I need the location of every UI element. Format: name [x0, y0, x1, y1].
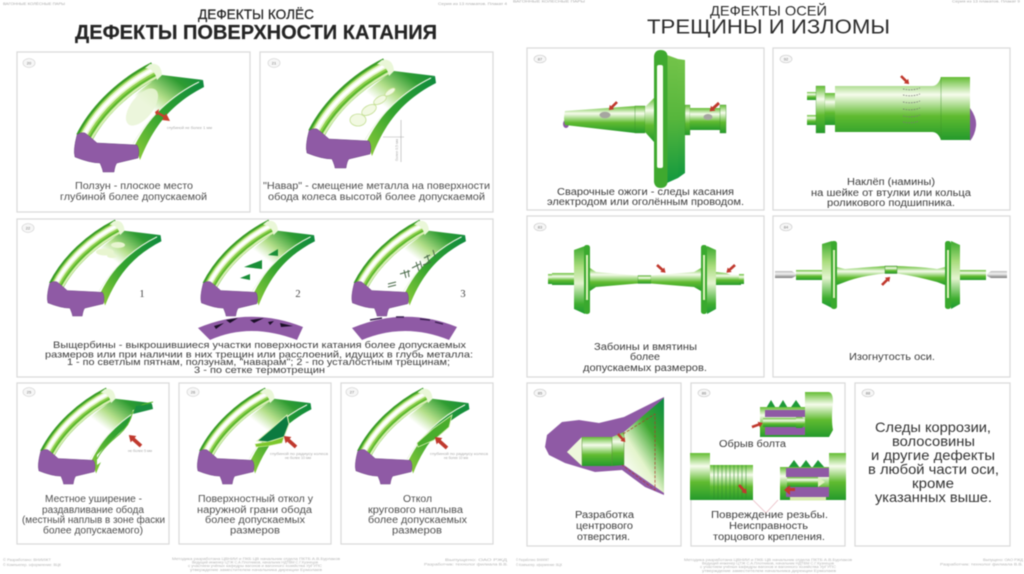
left poster header text — [3, 2, 507, 6]
wheel with widened rim: не более 5 мм — [128, 449, 153, 453]
caption: (местный наплыв в зоне фаски — [22, 514, 165, 526]
number badge 88: 88 — [866, 390, 871, 396]
wheel illustration with build-up — [306, 60, 436, 168]
large text: и другие дефекты — [871, 447, 995, 463]
number badge 92: 92 — [784, 56, 789, 62]
caption: 1 - по светлым пятнам, ползунам, "наварам"; 2 - по усталостным трещинам; — [67, 357, 450, 367]
pointer lines — [753, 500, 778, 513]
left poster header text: ВАГОННЫЕ КОЛЁСНЫЕ ПАРЫ — [3, 2, 65, 6]
number badge 26: 26 — [191, 390, 196, 394]
number badge 25: 25 — [27, 390, 32, 394]
axle end with wheel — [563, 50, 726, 188]
panel: flat spot, 20 — [17, 52, 250, 212]
number badge 84: 84 — [784, 224, 789, 230]
wheel 2: fatigue crack spalling: 2 — [295, 289, 301, 300]
number badge 87: 87 — [538, 56, 543, 62]
wheel with chipped bead: не более 10 мм — [444, 456, 468, 460]
left poster footer text: Ведущий инженер ЦТЖ С.А.Плотников, начальник НДТВМ С.Г.Кузнецов — [192, 560, 318, 564]
centre hole section drawing — [545, 397, 664, 495]
panel: nicks and dents, 83 — [527, 216, 764, 377]
caption: наружной грани обода — [197, 504, 312, 516]
panel: centre hole wear, 85 — [527, 383, 681, 546]
panel: bolt and thread damage, 86 — [690, 383, 846, 546]
caption: на шейке от втулки или кольца — [811, 188, 971, 199]
caption: размеров — [392, 526, 442, 536]
right poster footer text: © Разработано: ВНИИЖТ — [516, 558, 549, 562]
wheel 1: bright spot spalling — [47, 221, 161, 316]
caption — [60, 181, 207, 203]
right poster footer text: Методика разработана ЦВНИИ и ПКБ ЦВ начальник отдела ПКТБ А.В.Бурлаков — [684, 558, 852, 562]
caption: Местное уширение - — [45, 494, 142, 505]
number badge 85 — [534, 389, 546, 397]
caption: электродом или оголённым проводом. — [547, 197, 744, 208]
large text — [868, 419, 999, 505]
left poster header text: Серия из 13 плакатов. Плакат 4 — [438, 2, 507, 6]
right poster footer text — [516, 558, 1024, 573]
large text: в любой части оси, — [868, 461, 999, 477]
left poster footer text: Методика разработана ЦВНИИ и ПКБ ЦВ начальник отдела ПКТБ А.В.Бурлаков — [172, 557, 340, 561]
caption: Ползун - плоское место — [75, 181, 193, 192]
number badge 83: 83 — [538, 224, 543, 230]
caption — [583, 341, 707, 374]
caption — [45, 340, 473, 375]
caption: Разработка — [575, 509, 634, 521]
right poster footer text: с участием учёных кафедры вагонов и вагонного хозяйства УрГУПС — [700, 565, 837, 569]
wheel with chipped bead: глубиной по радиусу колеса — [430, 452, 488, 456]
panel: journal dents, 92 — [773, 48, 1010, 210]
panel: other defects, 88 — [855, 383, 1010, 546]
right poster footer text: Выпущено: ОАО РЖД — [983, 558, 1024, 562]
caption — [263, 181, 490, 203]
title: wheel defects — [75, 6, 437, 44]
caption: Сварочные ожоги - следы касания — [557, 187, 734, 198]
thread damage drawing — [690, 453, 753, 500]
right poster footer text: Разработчик: технолог филиала В.В. — [940, 562, 1023, 566]
title: axle defects — [647, 2, 890, 38]
caption — [197, 494, 313, 536]
caption: раздавливание обода — [42, 504, 144, 516]
number badge 85: 85 — [538, 390, 543, 396]
wheel 3: thermal crack mesh spalling: 3 — [460, 289, 466, 300]
number badge 22 — [22, 224, 34, 232]
large text: указанных выше. — [875, 489, 992, 505]
number badge 86: 86 — [702, 390, 707, 396]
title: wheel defects: ДЕФЕКТЫ ПОВЕРХНОСТИ КАТАНИЯ — [75, 22, 437, 44]
caption: Изогнутость оси. — [849, 352, 935, 363]
caption: размеров — [230, 526, 280, 536]
caption — [811, 177, 971, 209]
number badge 20: 20 — [27, 60, 32, 66]
rim cross-section 2 — [198, 317, 303, 340]
left poster footer text: Разработчик: технолог филиала В.В. — [424, 562, 508, 566]
wheel illustration with flat spot — [74, 64, 213, 172]
broken bolt drawing — [751, 392, 833, 437]
caption: более допускаемого) — [43, 524, 143, 536]
bent wheelset drawing — [775, 241, 1007, 309]
caption: допускаемых размеров. — [583, 363, 707, 374]
right poster footer text: © Компьютер. оформление: ВЦК — [516, 563, 562, 567]
caption — [575, 509, 634, 543]
number badge 26 — [187, 388, 199, 396]
end fastening damage drawing — [780, 453, 846, 500]
number badge 84 — [780, 223, 792, 231]
right poster footer text: утверждение заместителем начальника дирекции Ермолаев — [702, 569, 836, 573]
caption: "Навар" - смещение металла на поверхности — [263, 181, 490, 192]
number badge 21 — [268, 58, 280, 68]
number badge 21: 21 — [272, 60, 277, 66]
wheel with chipped rim: не более 10 мм — [285, 456, 312, 460]
caption: кругового наплыва — [368, 505, 463, 516]
left poster footer text: Выпущено: ОАО РЖД — [445, 558, 508, 562]
caption: Наклёп (намины) — [847, 177, 935, 188]
number badge 27: 27 — [350, 390, 355, 394]
caption: глубиной более допускаемой — [60, 191, 207, 203]
caption: 3 - по сетке термотрещин — [194, 365, 325, 375]
title: axle defects: ТРЕЩИНЫ И ИЗЛОМЫ — [647, 16, 890, 38]
caption: обода колеса высотой более допускаемой — [268, 191, 485, 203]
number badge 27 — [346, 388, 358, 396]
caption: отверстия. — [577, 532, 630, 543]
panel: surface chip, 26 — [179, 383, 331, 544]
caption — [22, 494, 165, 536]
panel: circular bead chip, 27 — [341, 383, 493, 544]
wheel with widened rim — [38, 389, 156, 484]
left poster footer text — [3, 557, 508, 572]
caption: Забоины и вмятины — [594, 341, 697, 353]
left poster footer text: © Разработано: ВНИИЖТ — [3, 558, 51, 562]
number badge 92 — [780, 55, 792, 63]
left poster footer text: © Компьютер. оформление: ВЦК — [3, 563, 61, 567]
caption: Поверхностный откол у — [198, 494, 313, 505]
wheel 3: thermal crack mesh spalling — [352, 221, 466, 316]
caption: более допускаемых — [205, 514, 305, 526]
caption: более — [630, 351, 660, 363]
number badge 22: 22 — [26, 226, 31, 230]
wheel with chipped rim: глубиной по радиусу колеса — [270, 452, 328, 456]
wheel 1: bright spot spalling: 1 — [139, 289, 145, 300]
panel: local widening, 25 — [17, 383, 169, 544]
wheel illustration with flat spot: глубиной не более 1 мм — [167, 126, 213, 130]
panel: bent axle, 84 — [773, 216, 1010, 377]
title: wheel defects: ДЕФЕКТЫ КОЛЁС — [198, 6, 314, 22]
number badge 87 — [534, 55, 546, 63]
left poster footer text: утверждение заместителем начальника дирекции Ермолаев — [190, 568, 322, 572]
number badge 88 — [862, 389, 874, 397]
caption — [547, 187, 744, 208]
axle journal drawing — [807, 74, 976, 141]
panel: weld build-up, 21 — [260, 52, 493, 212]
wheel illustration with build-up: более 0,5 мм — [395, 138, 399, 161]
wheel 2: fatigue crack spalling — [201, 221, 315, 316]
caption — [711, 509, 828, 543]
caption: Выщербины - выкрошившиеся участки поверхности катания более допускаемых — [53, 340, 466, 350]
wheel with chipped bead — [355, 389, 488, 484]
caption: роликового подшипника. — [827, 198, 955, 209]
label: bolt break: Обрыв болта — [719, 438, 786, 450]
wheelset drawing — [548, 245, 744, 314]
panel: spalling, 22 — [17, 219, 493, 377]
caption: Неисправность — [729, 521, 808, 532]
caption: торцового крепления. — [713, 532, 825, 543]
rim cross-section 3 — [352, 317, 457, 340]
caption: центрового — [576, 521, 633, 532]
caption: более допускаемых — [368, 514, 467, 526]
caption: Повреждение резьбы. — [711, 509, 828, 521]
caption — [368, 494, 467, 536]
large text: Следы коррозии, — [875, 419, 991, 435]
caption: размеров или при наличии в них трещин или расслоений, идущих в глубь металла: — [45, 350, 473, 360]
number badge 25 — [23, 388, 35, 396]
panel: welding burns, 87 — [527, 48, 764, 210]
right poster header text — [513, 0, 1020, 4]
left poster footer text: с участием учёных кафедры вагонов и вагонного хозяйства УрГУПС — [188, 564, 323, 568]
title: axle defects: ДЕФЕКТЫ ОСЕЙ — [710, 2, 827, 18]
number badge 83 — [534, 223, 546, 231]
number badge 20 — [23, 58, 35, 68]
wheel with chipped rim — [197, 389, 328, 484]
right poster footer text: Ведущий инженер ЦТЖ С.А.Плотников, начальник НДТВМ С.Г.Кузнецов — [702, 562, 834, 566]
large text: волосовины — [892, 433, 975, 449]
large text: кроме — [912, 475, 954, 491]
caption: Откол — [403, 494, 432, 505]
number badge 86 — [698, 389, 710, 397]
